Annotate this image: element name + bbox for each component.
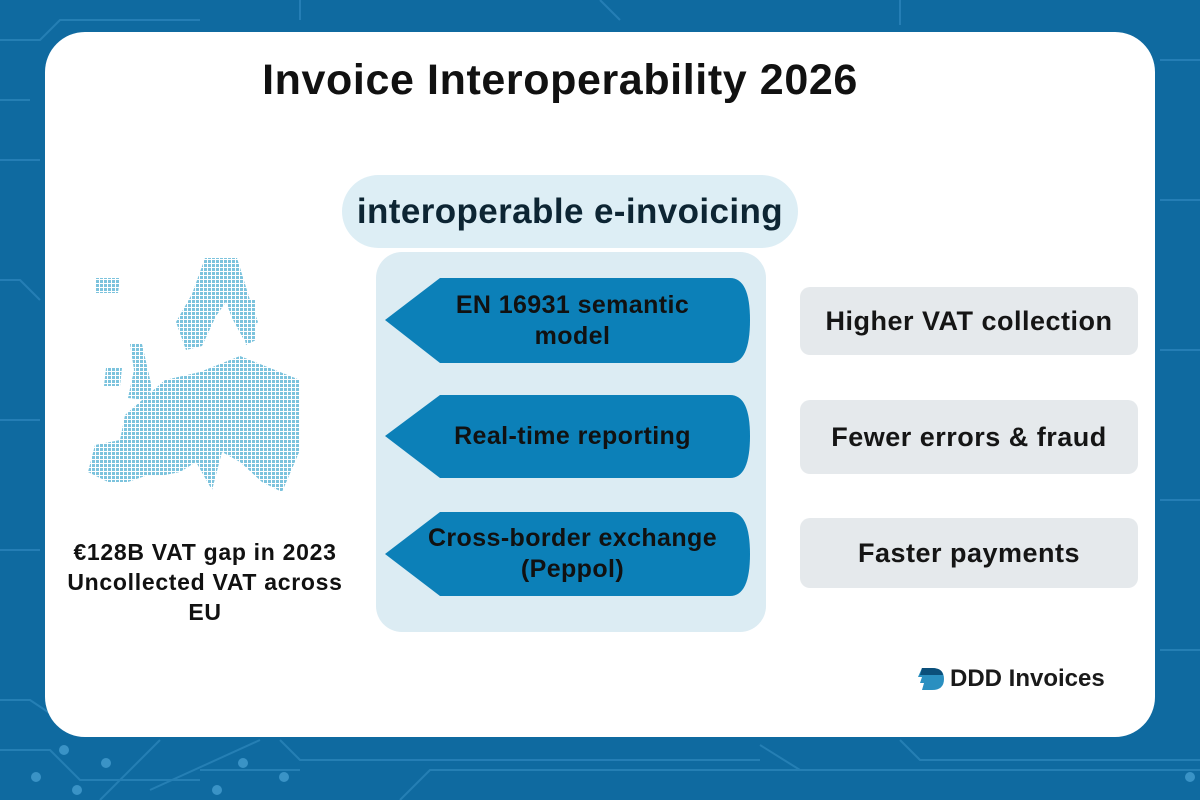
benefit: Fewer errors & fraud: Fewer errors & fraud: [831, 422, 1107, 452]
panel: pillars: [376, 252, 766, 632]
text: VAT gap stat: Uncollected VAT across: [67, 569, 343, 595]
logo: DDD Invoices: DDD Invoices: [950, 665, 1105, 692]
arrow: EN 16931 semantic model: EN 16931 semantic: [456, 290, 689, 318]
text: VAT gap stat: €128B VAT gap in 2023: [73, 539, 337, 565]
text: VAT gap stat: EU: [188, 599, 222, 625]
icon: logo mark: [918, 668, 944, 690]
text: VAT gap stat: [67, 539, 343, 625]
benefit: Higher VAT collection: Higher VAT collection: [825, 306, 1113, 336]
benefit: Higher VAT collection: [800, 287, 1138, 355]
benefit: Fewer errors & fraud: [800, 400, 1138, 474]
title: Invoice Interoperability 2026: [262, 56, 858, 104]
arrow: Cross-border exchange (Peppol): (Peppol): [521, 555, 624, 583]
pill heading: interoperable e-invoicing: [342, 175, 798, 248]
arrow: Cross-border exchange (Peppol): Cross-border exchange: [428, 524, 717, 552]
arrow: Cross-border exchange (Peppol): [385, 512, 750, 596]
arrow: Real-time reporting: Real-time reporting: [454, 422, 691, 450]
arrow: Real-time reporting: [385, 395, 750, 478]
icon: dotted Europe map: [88, 258, 299, 491]
arrow: EN 16931 semantic model: model: [535, 322, 610, 350]
arrow: EN 16931 semantic model: [385, 278, 750, 363]
benefit: Faster payments: [800, 518, 1138, 588]
benefit: Faster payments: Faster payments: [858, 538, 1080, 568]
pill heading: interoperable e-invoicing: interoperable e-invoicing: [357, 192, 783, 231]
